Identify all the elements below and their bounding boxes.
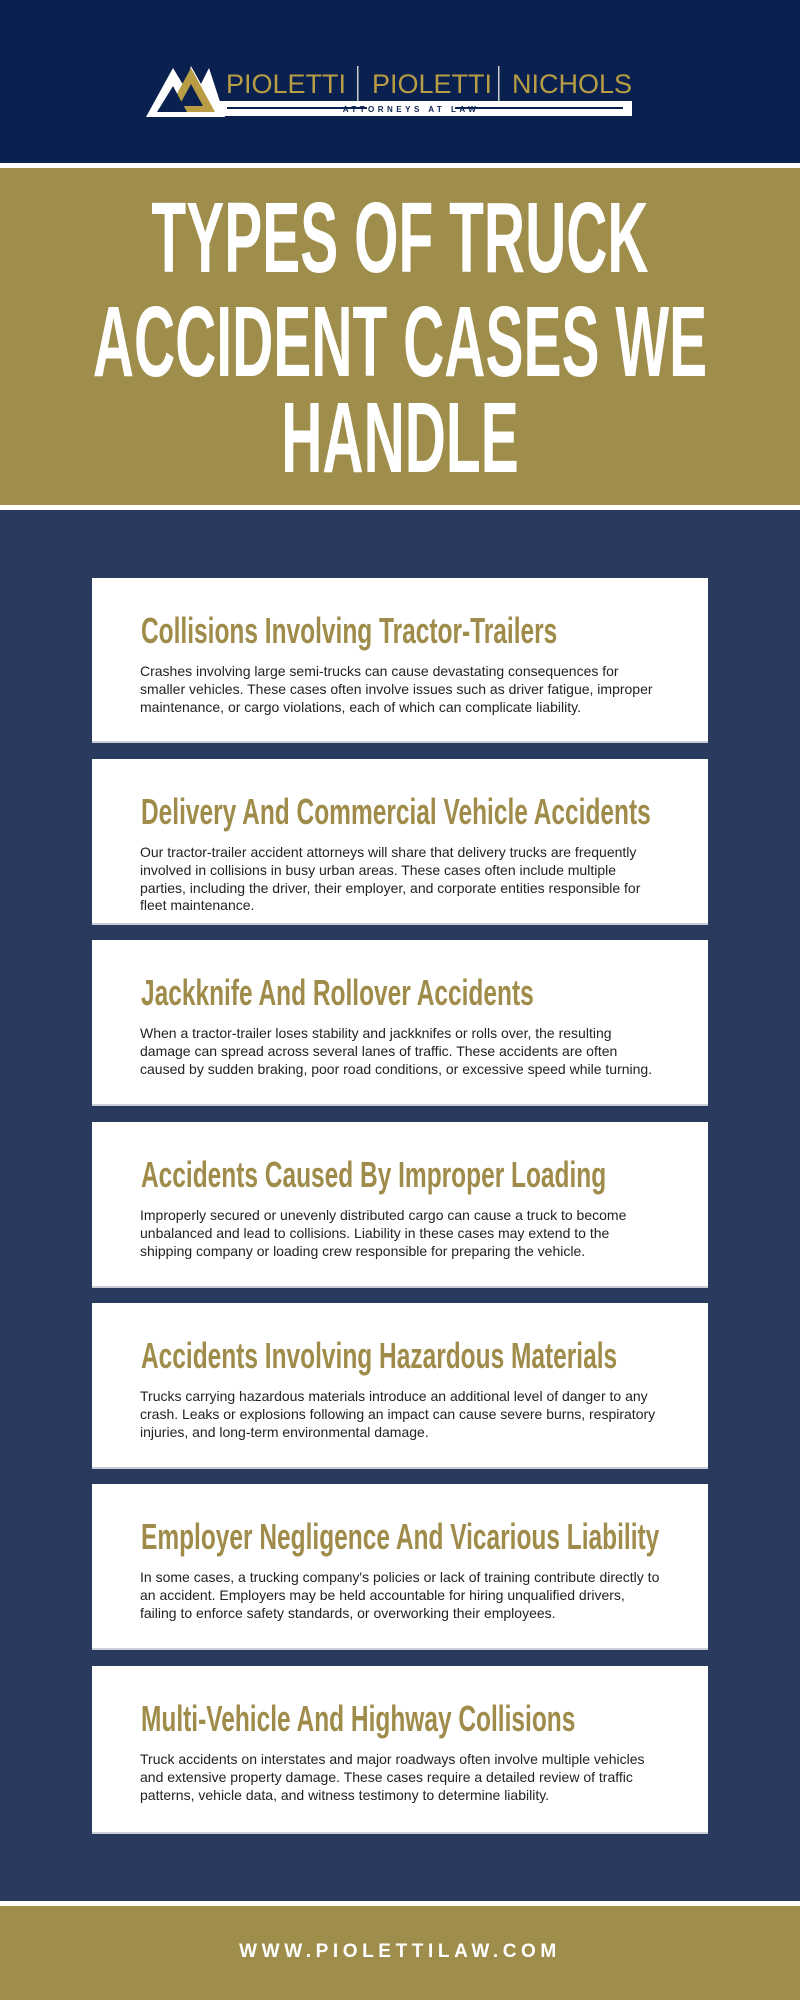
card 5: Accidents Involving Hazardous Materials bbox=[141, 1335, 617, 1376]
card 6: Employer Negligence And Vicarious Liability bbox=[141, 1516, 659, 1557]
card 6 bbox=[92, 1484, 708, 1650]
card 6: In some cases, a trucking company's policies or lack of training contribute directly to an accident. Employers may be held accountable for hiring unqualified drivers, failing to enforce safety standards, or overworking their employees. bbox=[140, 1569, 659, 1621]
logo: PIOLETTI bbox=[226, 69, 346, 99]
logo: ATTORNEYS AT LAW bbox=[343, 105, 479, 114]
card 3: When a tractor-trailer loses stability and jackknifes or rolls over, the resulting damage can spread across several lanes of traffic. These accidents are often caused by sudden braking, poor road conditions, or excessive speed while turning. bbox=[140, 1025, 652, 1077]
card 7 bbox=[92, 1666, 708, 1834]
logo: PIOLETTI bbox=[372, 69, 492, 99]
card 3: Jackknife And Rollover Accidents bbox=[141, 972, 534, 1013]
card 1 bbox=[92, 578, 708, 743]
card 2: Our tractor-trailer accident attorneys will share that delivery trucks are frequently involved in collisions in busy urban areas. These cases often include multiple parties, including the driver, their employer, and corporate entities responsible for fleet maintenance. bbox=[140, 844, 640, 913]
title: ACCIDENT CASES WE bbox=[93, 286, 707, 398]
title: TYPES OF TRUCK bbox=[151, 182, 649, 294]
card 1: Collisions Involving Tractor-Trailers bbox=[141, 610, 557, 651]
card 2 bbox=[92, 759, 708, 925]
logo bbox=[146, 66, 632, 117]
footer url: WWW.PIOLETTILAW.COM bbox=[239, 1941, 561, 1962]
card 3 bbox=[92, 940, 708, 1106]
card 2: Delivery And Commercial Vehicle Accidents bbox=[141, 791, 651, 832]
card 1: Crashes involving large semi-trucks can cause devastating consequences for smaller vehicles. These cases often involve issues such as driver fatigue, improper maintenance, or cargo violations, each of which can complicate liability. bbox=[140, 663, 653, 715]
logo: NICHOLS bbox=[512, 69, 632, 99]
card 7: Truck accidents on interstates and major roadways often involve multiple vehicles and extensive property damage. These cases require a detailed review of traffic patterns, vehicle data, and witness testimony to determine liability. bbox=[140, 1751, 644, 1803]
card 4: Improperly secured or unevenly distributed cargo can cause a truck to become unbalanced and lead to collisions. Liability in these cases may extend to the shipping company or loading crew responsible for preparing the vehicle. bbox=[140, 1207, 626, 1259]
footer band bbox=[0, 1906, 800, 2000]
card 5: Trucks carrying hazardous materials introduce an additional level of danger to any crash. Leaks or explosions following an impact can cause severe burns, respiratory injuries, and long-term environmental damage. bbox=[140, 1388, 655, 1440]
card 5 bbox=[92, 1303, 708, 1469]
title band bbox=[0, 168, 800, 505]
title bbox=[93, 182, 707, 494]
title: HANDLE bbox=[281, 382, 519, 494]
card 7: Multi-Vehicle And Highway Collisions bbox=[141, 1698, 575, 1739]
header band bbox=[0, 0, 800, 163]
card 4: Accidents Caused By Improper Loading bbox=[141, 1154, 606, 1195]
card 4 bbox=[92, 1122, 708, 1288]
